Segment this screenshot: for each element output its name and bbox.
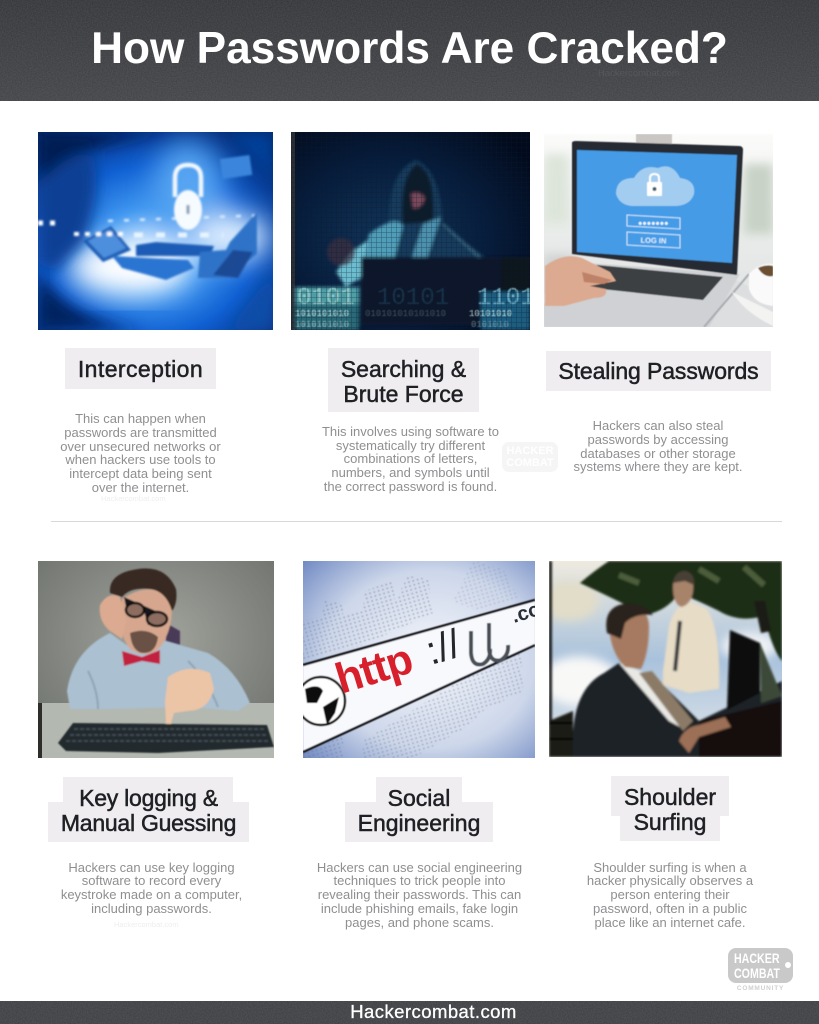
- section divider: [51, 521, 782, 522]
- watermark: Hackercombat.com: [114, 920, 179, 929]
- photo: phishing URL with fish hooks: http: [330, 635, 418, 704]
- heading: Shoulder Surfing: Surfing: [634, 808, 706, 834]
- heading: Searching & Brute Force: Searching &: [341, 356, 466, 382]
- header watermark: Hackercombat.com: [598, 68, 680, 79]
- description: searching and brute force: systematically try different: [336, 438, 485, 453]
- description: key logging: [61, 860, 242, 916]
- description: key logging: software to record every: [82, 873, 221, 888]
- description: interception: This can happen when: [75, 411, 206, 426]
- photo: phishing URL with fish hooks: ://: [421, 622, 466, 674]
- description: shoulder surfing: hacker physically observes a: [587, 873, 753, 888]
- description: interception: over the internet.: [92, 480, 189, 495]
- panel: key logging and manual guessing: [38, 561, 274, 916]
- description: searching and brute force: the correct password is found.: [324, 479, 497, 494]
- description: shoulder surfing: [587, 860, 754, 930]
- photo: hooded hacker with binary digits: 0101010: [471, 320, 509, 330]
- photo: padlock over blue network devices: [38, 132, 273, 330]
- description: key logging: including passwords.: [91, 901, 212, 916]
- description: interception: over unsecured networks or: [60, 438, 221, 454]
- description: social engineering: techniques to trick people into: [334, 873, 506, 888]
- description: social engineering: revealing their passwords. This can: [318, 887, 521, 902]
- watermark logo: [502, 442, 558, 472]
- description: social engineering: pages, and phone scams.: [345, 914, 494, 930]
- description: stealing passwords: Hackers can also steal: [593, 418, 723, 433]
- heading: Shoulder Surfing: Shoulder: [624, 784, 716, 810]
- description: shoulder surfing: password, often in a public: [593, 901, 747, 916]
- description: shoulder surfing: person entering their: [610, 887, 730, 902]
- heading: Searching & Brute Force: Brute Force: [343, 380, 464, 406]
- photo: man watching over another's shoulder on a bench: [549, 561, 782, 757]
- photo: phishing URL with fish hooks: [303, 561, 535, 758]
- heading: Social Engineering: Engineering: [358, 810, 480, 836]
- description: interception: when hackers use tools to: [65, 452, 216, 467]
- description: interception: intercept data being sent: [69, 466, 212, 481]
- heading: Searching & Brute Force: [328, 348, 479, 412]
- description: shoulder surfing: Shoulder surfing is when a: [593, 860, 747, 874]
- heading: Stealing Passwords: Stealing Passwords: [558, 358, 759, 384]
- photo: hooded hacker with binary digits: 010101010101010: [365, 309, 446, 319]
- heading: Stealing Passwords: [546, 351, 771, 391]
- description: social engineering: [317, 860, 522, 930]
- panel: shoulder surfing: [549, 561, 782, 930]
- logo: Hacker Combat Community: COMMUNITY: [737, 985, 784, 992]
- description: key logging: Hackers can use key logging: [68, 860, 235, 874]
- description: interception: passwords are transmitted: [64, 425, 217, 440]
- watermark logo: COMBAT: [506, 457, 554, 469]
- heading: Shoulder Surfing: [611, 776, 729, 841]
- photo: hooded hacker with binary digits: 0101: [297, 285, 355, 312]
- photo: hooded hacker with binary digits: 1010101010: [295, 320, 349, 330]
- heading: Key logging & Manual Guessing: Key logging &: [79, 785, 218, 811]
- description: searching and brute force: numbers, and symbols until: [331, 465, 490, 480]
- heading: Social Engineering: [345, 777, 493, 842]
- photo: hooded hacker with binary digits: 1010101010: [295, 309, 349, 319]
- description: searching and brute force: [322, 424, 499, 494]
- description: stealing passwords: databases or other storage: [580, 446, 736, 460]
- panel: social engineering: [303, 561, 535, 930]
- heading: Social Engineering: Social: [388, 785, 450, 811]
- heading: Interception: Interception: [78, 356, 203, 382]
- title: How Passwords Are Cracked?: [91, 24, 728, 73]
- photo: hooded hacker with binary digits: 10101010: [469, 309, 512, 319]
- description: social engineering: include phishing emails, fake login: [321, 901, 518, 916]
- description: searching and brute force: This involves using software to: [322, 424, 499, 439]
- description: social engineering: Hackers can use social engineering: [317, 860, 522, 874]
- heading: Interception: [65, 348, 216, 389]
- footer band: [0, 1001, 819, 1024]
- watermark logo: HACKER: [506, 445, 554, 457]
- heading: Key logging & Manual Guessing: Manual Guessing: [61, 810, 236, 836]
- logo: Hacker Combat Community: COMBAT: [734, 964, 780, 980]
- panel: searching and brute force: [291, 132, 530, 494]
- panel: interception: [38, 132, 273, 495]
- description: shoulder surfing: place like an internet cafe.: [594, 914, 746, 930]
- photo: bored man typing on a keyboard: [38, 561, 274, 758]
- photo: laptop login screen: LOG IN: [640, 236, 667, 245]
- logo: Hacker Combat Community: HACKER: [734, 950, 780, 966]
- description: stealing passwords: systems where they are kept.: [573, 459, 743, 474]
- footer text: Hackercombat.com: [350, 1001, 517, 1022]
- description: stealing passwords: [573, 418, 743, 474]
- heading: Key logging & Manual Guessing: [48, 777, 249, 842]
- photo: laptop login screen: [544, 134, 773, 327]
- panel: stealing passwords: [544, 134, 773, 474]
- photo: laptop login screen: •••••••: [638, 218, 669, 230]
- photo: hooded hacker with binary digits: 10101: [377, 285, 449, 312]
- header band: [0, 0, 819, 101]
- watermark: Hackercombat.com: [101, 494, 166, 503]
- logo: Hacker Combat Community: [728, 948, 793, 992]
- description: stealing passwords: passwords by accessing: [588, 432, 728, 447]
- description: key logging: keystroke made on a computer,: [61, 887, 242, 902]
- description: interception: [60, 411, 221, 495]
- photo: hooded hacker with binary digits: [291, 132, 530, 330]
- description: searching and brute force: combinations of letters,: [344, 451, 477, 466]
